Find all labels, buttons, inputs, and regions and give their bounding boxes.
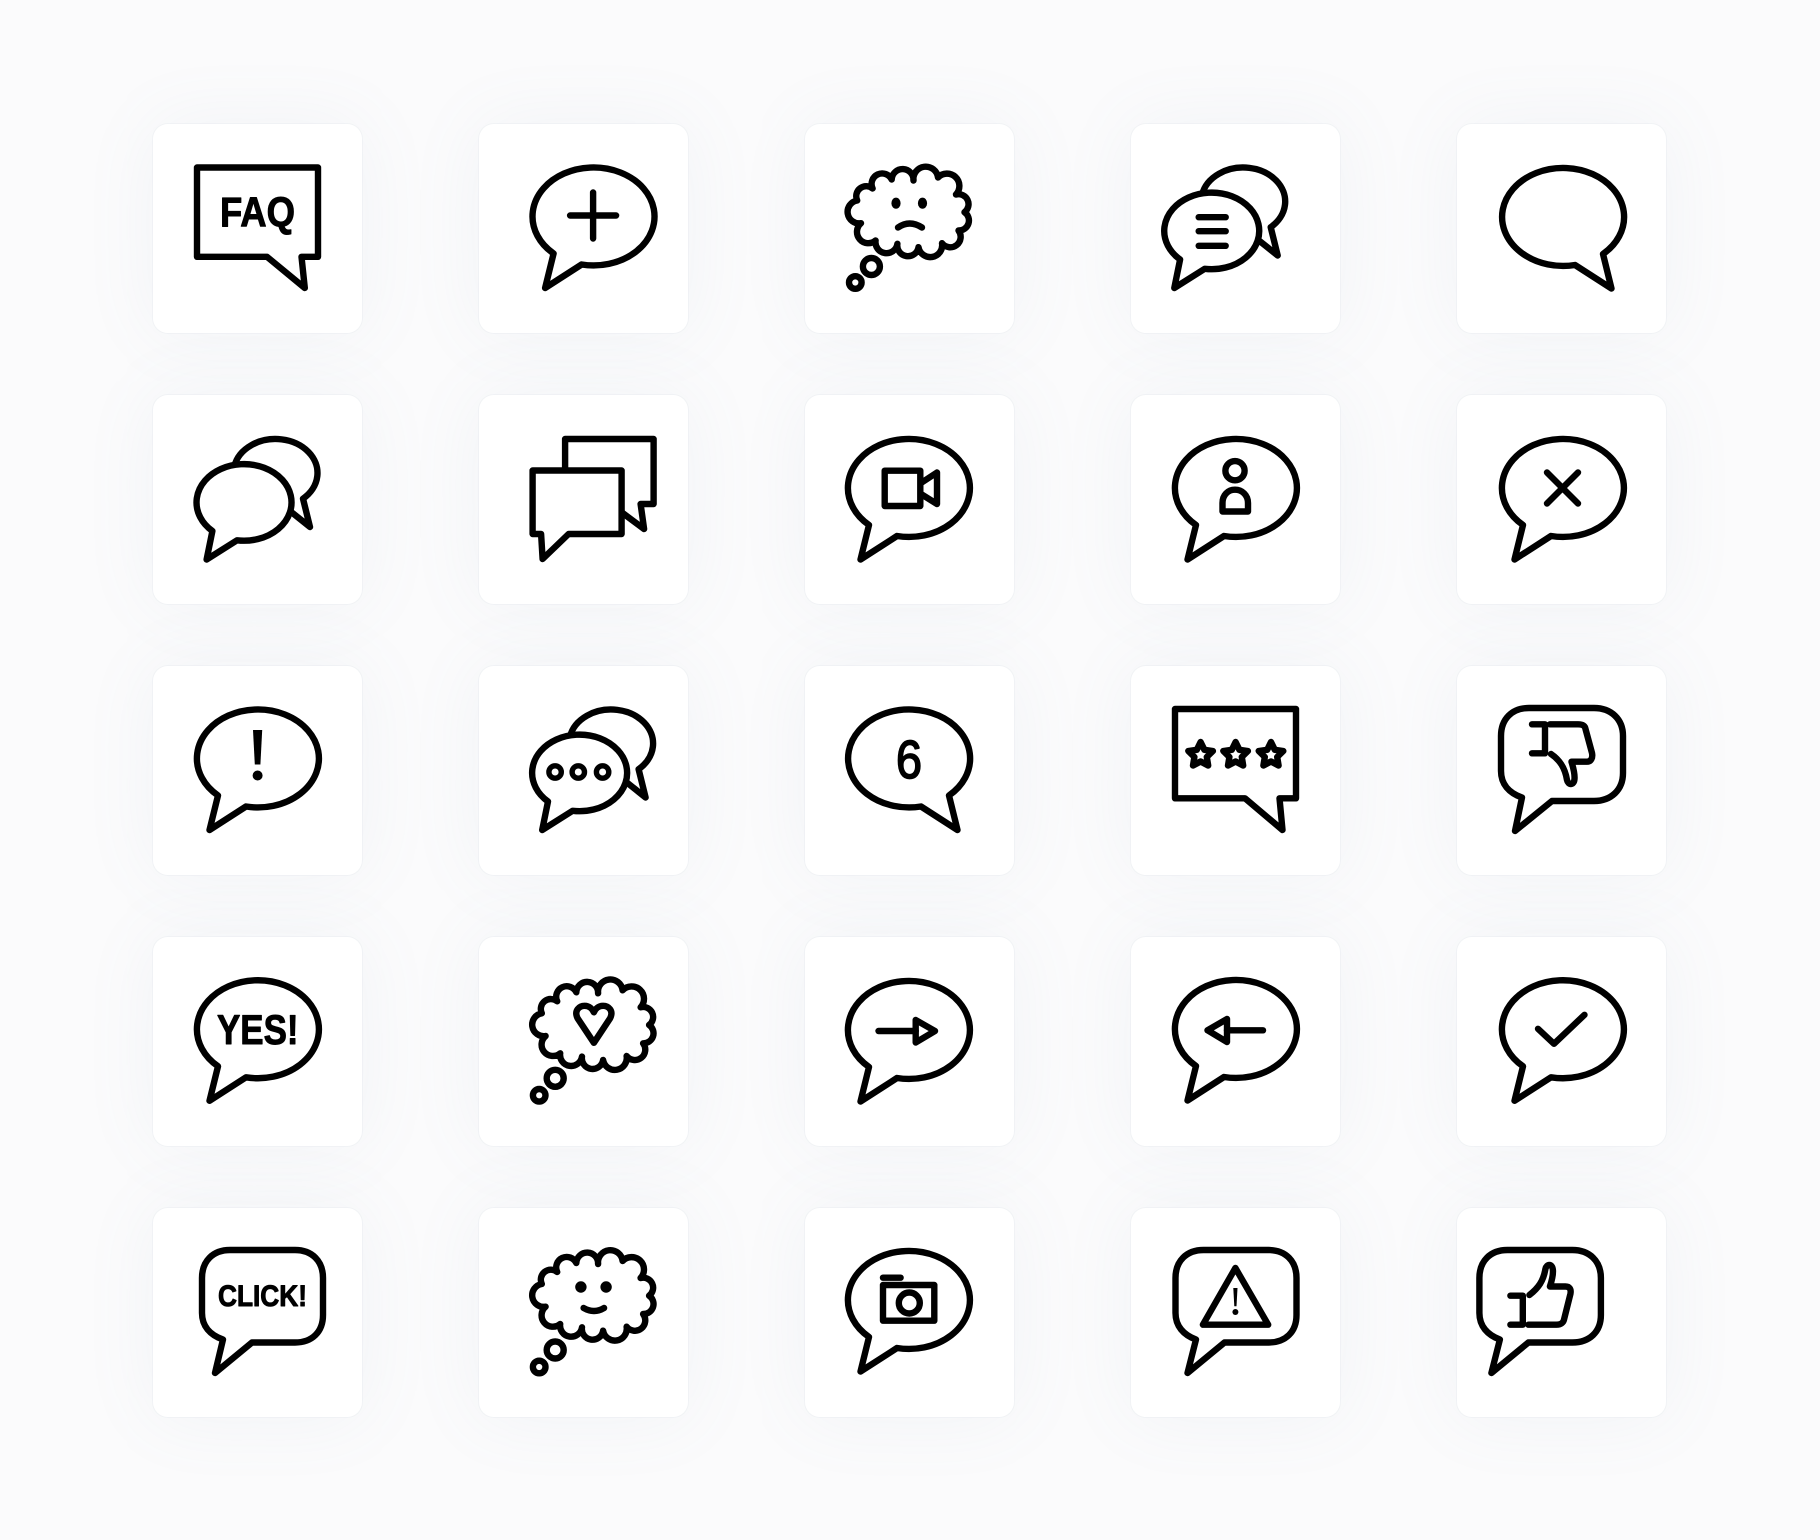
card: stars <box>1131 666 1340 875</box>
card: click <box>153 1208 362 1417</box>
icon: speech bubble with person <box>1172 436 1300 563</box>
icon: speech bubble with plus <box>529 164 658 292</box>
card: thumbs up <box>1457 1208 1666 1417</box>
icon: speech bubble with YES!: YES! <box>217 1006 298 1053</box>
card: camera <box>805 1208 1014 1417</box>
icon: rounded bubble with thumbs up <box>1476 1246 1604 1376</box>
card: two square bubbles <box>479 395 688 604</box>
icon: rectangular bubble with three stars <box>1172 706 1300 834</box>
card: FAQ <box>153 124 362 332</box>
card: check <box>1457 937 1666 1146</box>
card: close <box>1457 395 1666 604</box>
icon: two rectangular bubbles <box>529 436 657 562</box>
icon: rounded bubble with warning triangle <box>1172 1246 1300 1376</box>
icon: two bubbles with text lines <box>1161 164 1288 292</box>
card: sad cloud <box>805 124 1014 332</box>
icon: smiling thought cloud <box>528 1247 657 1376</box>
card: exclamation <box>153 666 362 875</box>
icon: two plain speech bubbles <box>193 436 321 563</box>
icon: speech bubble with number 6: 6 <box>896 730 922 790</box>
icon: FAQ square speech bubble: FAQ <box>220 188 295 235</box>
card: person <box>1131 395 1340 604</box>
card: thumbs down <box>1457 666 1666 875</box>
card: typing <box>479 666 688 875</box>
icon: plain speech bubble with right tail <box>1498 164 1628 292</box>
icon: speech bubble with right arrow <box>844 978 974 1105</box>
card: number six <box>805 666 1014 875</box>
icon: speech bubble with video camera <box>844 436 974 563</box>
icon: speech bubble with YES! <box>194 977 322 1104</box>
icon: rounded bubble with CLICK! <box>198 1246 326 1376</box>
card: smile cloud <box>479 1208 688 1417</box>
card: two bubbles <box>153 395 362 604</box>
icon: speech bubble with left arrow <box>1172 976 1300 1104</box>
icon: sad thought cloud <box>844 164 972 292</box>
card: chat with lines <box>1131 124 1340 332</box>
icon: rounded bubble with CLICK!: CLICK! <box>218 1280 307 1313</box>
card: heart cloud <box>479 937 688 1146</box>
card: video <box>805 395 1014 604</box>
icon: FAQ square speech bubble <box>194 164 322 292</box>
icon: thought cloud with heart <box>528 976 657 1105</box>
icon: two bubbles with three dots <box>528 706 656 834</box>
card: arrow left <box>1131 937 1340 1146</box>
icon: speech bubble with check mark <box>1498 977 1628 1104</box>
icon: speech bubble with camera <box>844 1248 974 1375</box>
icon: rounded bubble with thumbs down <box>1498 704 1626 834</box>
card: yes <box>153 937 362 1146</box>
card: plus <box>479 124 688 332</box>
icon: speech bubble with exclamation mark <box>194 706 322 834</box>
card: warning <box>1131 1208 1340 1417</box>
icon: speech bubble with cross <box>1498 436 1628 563</box>
card: empty bubble <box>1457 124 1666 332</box>
icon: speech bubble with number 6 <box>844 706 974 834</box>
card: arrow right <box>805 937 1014 1146</box>
